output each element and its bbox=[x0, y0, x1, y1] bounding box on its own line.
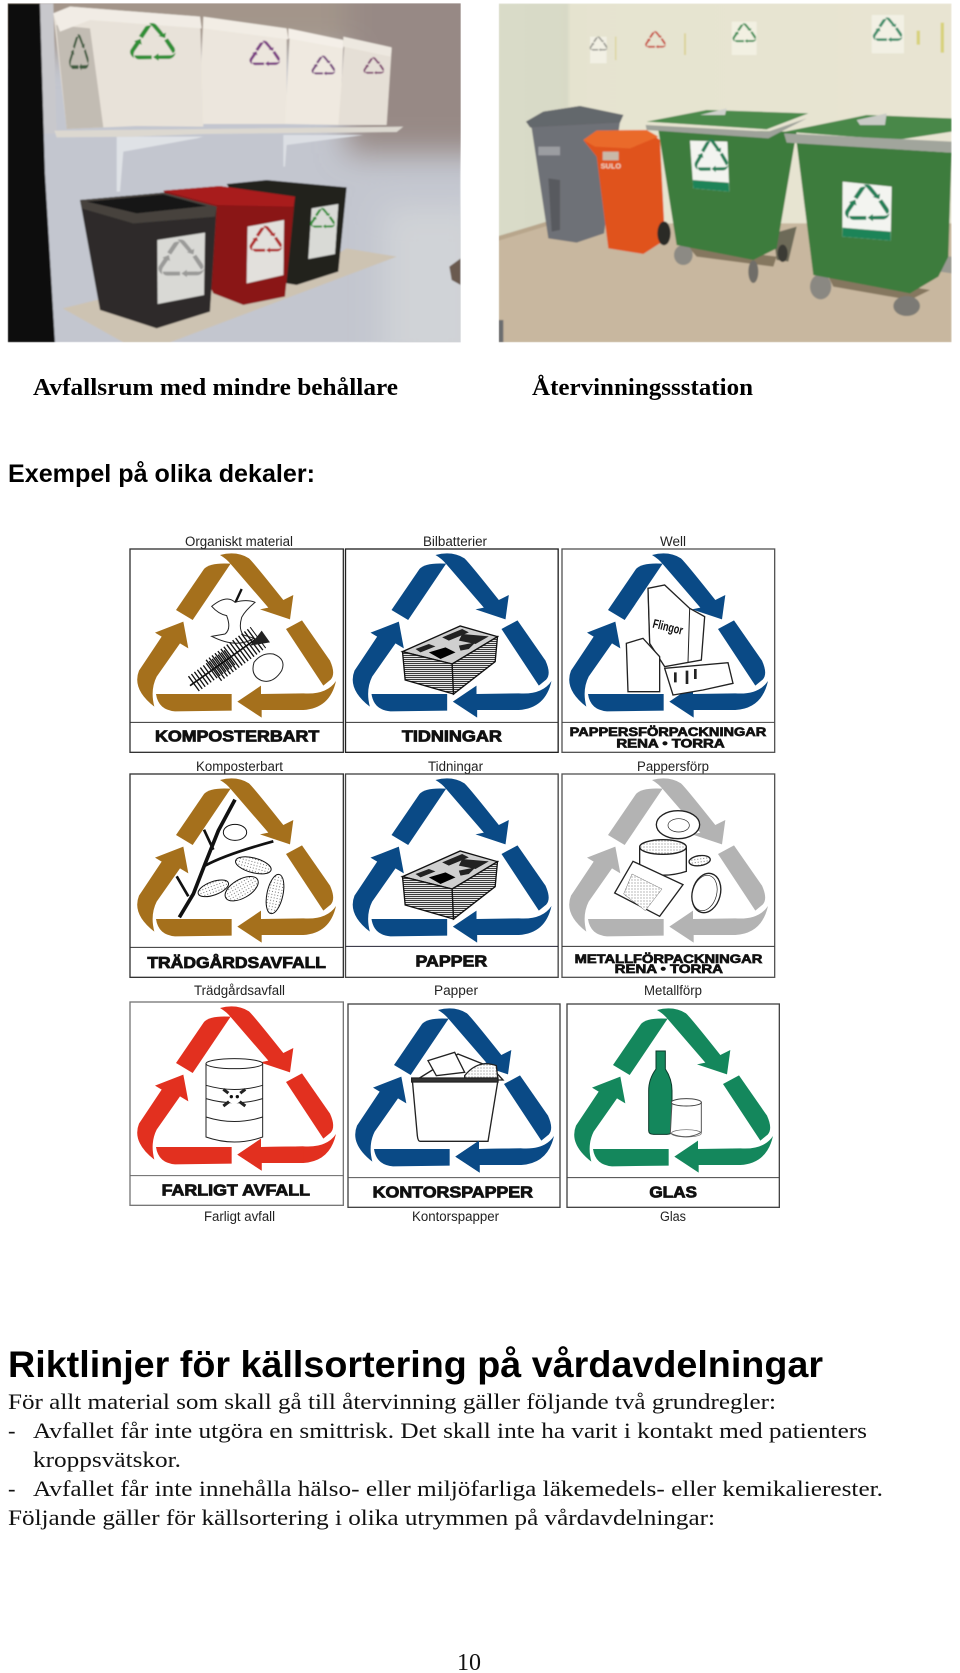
label: METALLFÖRPACKNINGAR RENA TORRA: METALLFÖRPACKNINGAR bbox=[575, 953, 763, 966]
label: second line: RENA • TORRA bbox=[615, 963, 724, 976]
icon: newspaper stack bbox=[402, 851, 497, 919]
sticker: hazardous waste bbox=[130, 1002, 343, 1205]
label: PAPPERSFÖRPACKNINGAR RENA TORRA: PAPPERSFÖRPACKNINGAR bbox=[570, 726, 767, 739]
sticker: paper bbox=[346, 774, 558, 977]
icon: apple core, fish bones, egg shell bbox=[190, 589, 283, 686]
photo: recycling station bbox=[499, 3, 952, 342]
icon: carton, bag and milk carton: Flingor bbox=[651, 617, 684, 638]
icon: bottle and jar bbox=[649, 1051, 701, 1137]
sticker: newspapers bbox=[346, 549, 558, 752]
icon: paper bin bbox=[412, 1052, 503, 1141]
label: second line: RENA • TORRA bbox=[616, 737, 725, 750]
label: FARLIGT AVFALL: FARLIGT AVFALL bbox=[162, 1182, 310, 1199]
text block: guidelines body: Avfallet får inte innehålla hälso- eller miljöfarliga läkemedels- eller kemikalierester. bbox=[33, 1476, 883, 1501]
caption: Glas: Glas bbox=[660, 1209, 686, 1224]
caption: Pappersförp: Pappersförp bbox=[637, 759, 709, 774]
icon: newspaper stack bbox=[402, 626, 497, 694]
caption: Organiskt material: Organiskt material bbox=[185, 534, 293, 549]
caption: Papper: Papper bbox=[434, 983, 478, 998]
icon: carton, bag and milk carton bbox=[626, 585, 733, 695]
text block: guidelines body: - bbox=[8, 1418, 16, 1443]
icon: barrel with skull bbox=[206, 1059, 263, 1142]
icon: cans and lids bbox=[615, 811, 725, 916]
caption: waste room: Avfallsrum med mindre behållare bbox=[33, 375, 398, 401]
caption: recycling station: Återvinningssstation bbox=[532, 375, 753, 401]
label: PAPPER: PAPPER bbox=[415, 953, 488, 970]
label: KONTORSPAPPER: KONTORSPAPPER bbox=[373, 1185, 533, 1202]
photo: recycling station: SULO bbox=[601, 161, 621, 170]
sticker: office paper bbox=[348, 1004, 560, 1207]
text block: guidelines body: Följande gäller för källsortering i olika utrymmen på vårdavdelningar: bbox=[8, 1505, 715, 1530]
caption: Farligt avfall: Farligt avfall bbox=[204, 1209, 275, 1224]
text block: guidelines body: För allt material som skall gå till återvinning gäller följande två grundregler: bbox=[8, 1389, 776, 1414]
label: KOMPOSTERBART: KOMPOSTERBART bbox=[155, 728, 320, 745]
sticker: compostable bbox=[130, 549, 343, 752]
sticker: paper packaging bbox=[562, 549, 775, 752]
text block: guidelines body bbox=[8, 1389, 883, 1530]
text block: guidelines body: - bbox=[8, 1476, 16, 1501]
sticker: metal packaging bbox=[562, 774, 775, 977]
heading: sticker examples: Exempel på olika dekaler: bbox=[8, 460, 315, 488]
caption: Komposterbart: Komposterbart bbox=[196, 759, 283, 774]
text block: guidelines body: kroppsvätskor. bbox=[33, 1447, 181, 1472]
label: TRÄDGÅRDSAVFALL: TRÄDGÅRDSAVFALL bbox=[147, 953, 326, 972]
text block: guidelines body: Avfallet får inte utgöra en smittrisk. Det skall inte ha varit i kontakt med patienters bbox=[33, 1418, 867, 1443]
caption: Tidningar: Tidningar bbox=[428, 759, 483, 774]
icon: branch with leaves bbox=[177, 800, 287, 917]
photo: waste room with smaller containers bbox=[8, 3, 461, 342]
caption: Kontorspapper: Kontorspapper bbox=[412, 1209, 499, 1224]
caption: Metallförp: Metallförp bbox=[644, 983, 702, 998]
caption: Trädgårdsavfall: Trädgårdsavfall bbox=[194, 983, 285, 998]
label: TIDNINGAR: TIDNINGAR bbox=[402, 729, 502, 746]
label: GLAS: GLAS bbox=[649, 1185, 697, 1202]
sticker: glass bbox=[567, 1004, 779, 1207]
heading: guidelines: Riktlinjer för källsortering på vårdavdelningar bbox=[8, 1344, 823, 1385]
sticker: garden waste bbox=[130, 774, 343, 977]
caption: Well: Well bbox=[660, 534, 686, 549]
caption: Bilbatterier: Bilbatterier bbox=[423, 534, 487, 549]
